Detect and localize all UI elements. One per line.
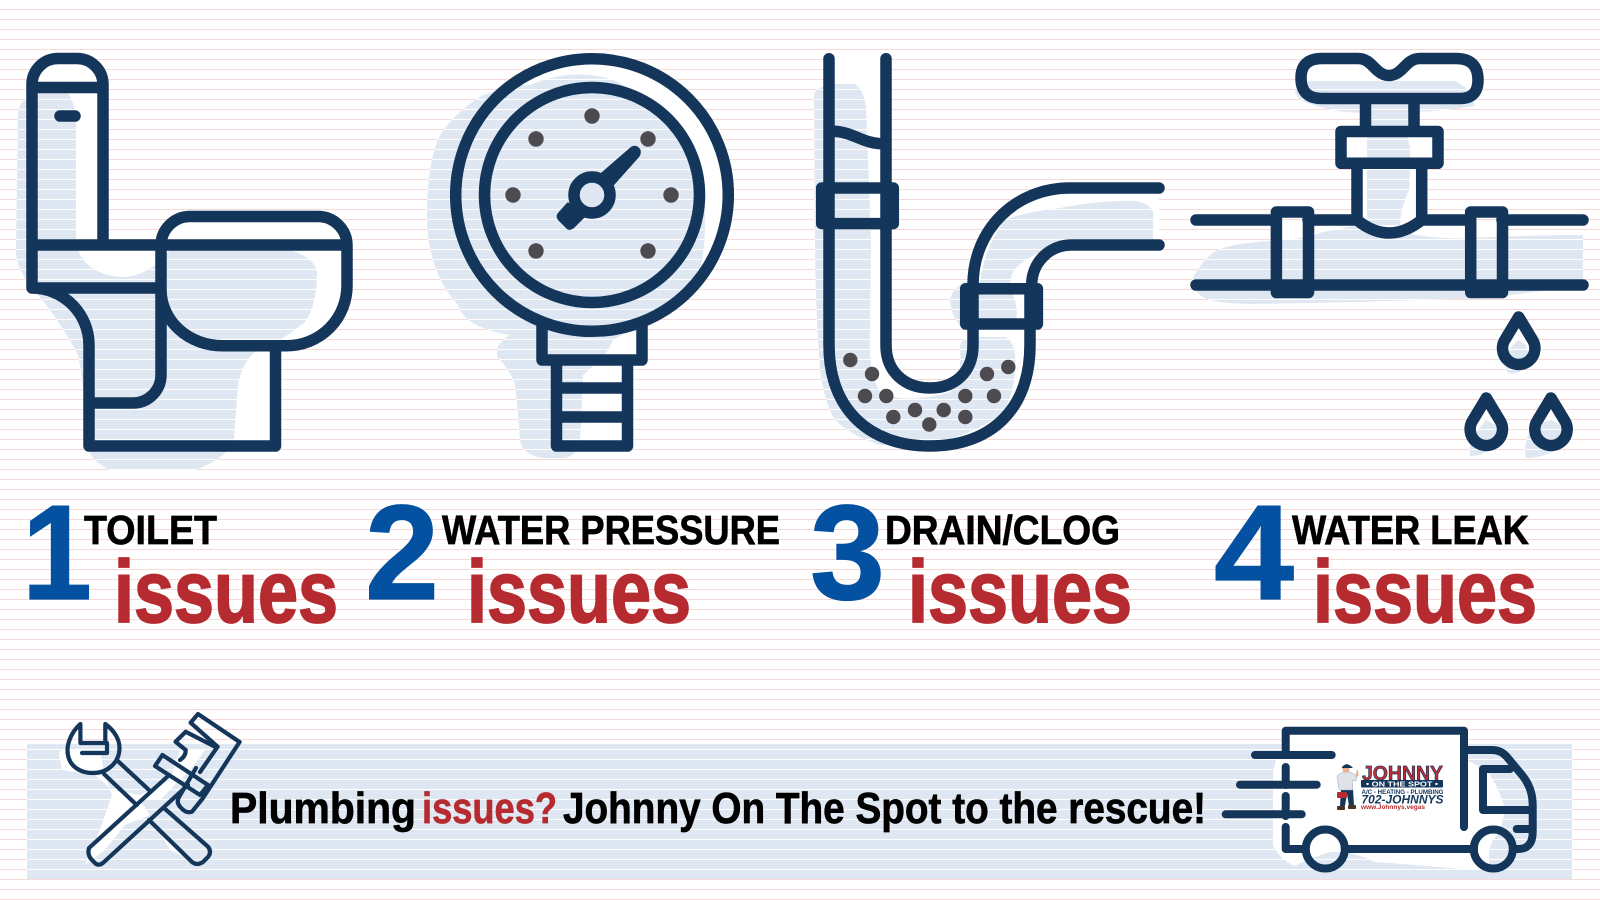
speed lines — [1226, 755, 1332, 814]
icon: leaking valve — [1192, 58, 1583, 458]
pipe blue blob — [1192, 226, 1583, 304]
gauge needle — [558, 147, 639, 228]
adjustable wrench — [68, 724, 210, 864]
pipe band lower — [966, 289, 1037, 324]
plumber mascot — [1337, 764, 1358, 810]
logo: johnny: JOHNNY — [1362, 763, 1444, 785]
gauge hub — [574, 177, 610, 213]
logo: website: www.Johnnys.vegas — [1360, 805, 1426, 811]
slogan: johnny on the spot: Johnny On The Spot to the rescue! — [563, 784, 1206, 833]
issues word: issues — [1313, 542, 1537, 641]
valve white silhouette — [1276, 58, 1502, 285]
number 4: 4 — [1214, 477, 1294, 628]
water leak heading: WATER LEAK — [1292, 507, 1529, 553]
drain pipe outline — [829, 59, 1159, 446]
label: toilet issues — [22, 477, 338, 641]
icon: crossed wrenches — [59, 714, 240, 865]
issues word: issues — [908, 542, 1132, 641]
slogan: issues: issues? — [422, 784, 557, 833]
icon: toilet — [16, 58, 347, 470]
pipes — [1196, 220, 1583, 285]
gauge neck and stem — [542, 325, 642, 446]
water pressure heading: WATER PRESSURE — [442, 507, 780, 553]
issues word: issues — [467, 542, 691, 641]
toilet blue blob — [16, 93, 317, 470]
front wheel — [1474, 830, 1513, 868]
label: water leak issues — [1214, 477, 1537, 641]
label: drain clog issues — [810, 477, 1132, 641]
slogan: plumbing: Plumbing — [230, 784, 416, 833]
valve handle blue blob — [1295, 81, 1475, 225]
truck cab — [1464, 750, 1533, 849]
truck white blob — [1273, 731, 1505, 870]
number 2: 2 — [365, 477, 439, 628]
gauge tick dots — [505, 108, 679, 259]
flush button — [60, 110, 75, 122]
number 3: 3 — [810, 477, 885, 628]
company logo — [1337, 763, 1444, 811]
issues word: issues — [114, 542, 338, 641]
valve stem and collar — [1341, 100, 1438, 163]
logo: services: A/C - HEATING - PLUMBING — [1362, 790, 1444, 796]
gauge outer ring — [456, 59, 728, 331]
banner slogan — [230, 784, 1206, 833]
water drops — [1470, 317, 1568, 458]
icon: delivery truck — [1226, 731, 1533, 870]
icon: pressure gauge — [427, 59, 729, 458]
number 1: 1 — [22, 477, 92, 628]
toilet heading: TOILET — [84, 507, 217, 553]
toilet white silhouette — [32, 58, 347, 446]
drain blue blob — [814, 84, 1015, 445]
gauge inner dial — [484, 88, 700, 302]
valve handle — [1301, 58, 1478, 98]
logo: on the spot bar — [1361, 780, 1443, 788]
icon: clogged drain — [814, 58, 1159, 446]
tools white blob — [59, 748, 205, 865]
truck body — [1286, 731, 1474, 849]
pipe wrench — [88, 714, 240, 865]
pipe band upper — [822, 188, 893, 224]
pipe flanges — [1276, 212, 1502, 292]
logo: on the spot: • ON THE SPOT • — [1366, 780, 1438, 788]
gauge white silhouette — [455, 59, 729, 446]
label: water pressure issues — [365, 477, 780, 641]
truck wheels — [1306, 830, 1345, 868]
clog particles — [843, 353, 1016, 432]
valve body — [1357, 165, 1422, 233]
drain white silhouette — [829, 58, 1159, 446]
panel: bottom banner — [27, 744, 1572, 879]
toilet outline — [32, 58, 347, 446]
logo: phone: 702-JOHNNYS — [1362, 794, 1444, 806]
gauge blue blob — [427, 74, 705, 458]
drain clog heading: DRAIN/CLOG — [885, 507, 1120, 553]
drain bend blue blob — [950, 201, 1153, 330]
